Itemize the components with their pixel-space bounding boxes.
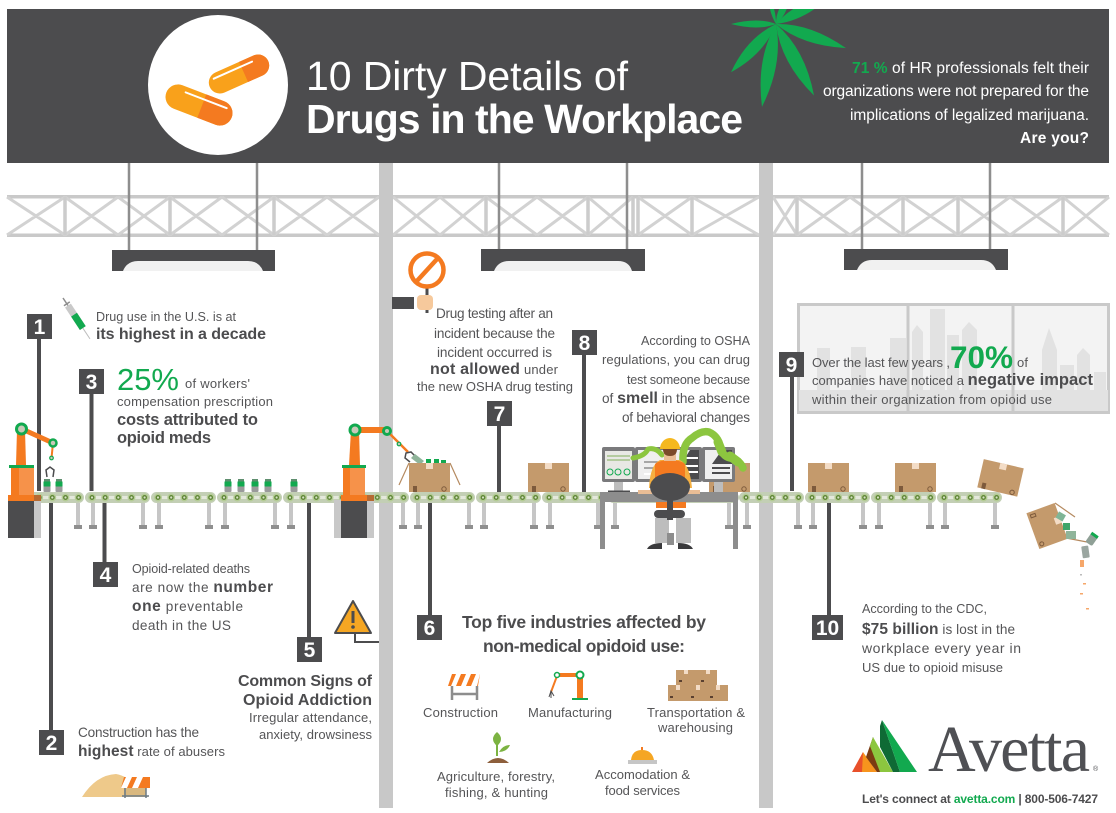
title (306, 53, 743, 142)
item 4: opioid deaths (93, 562, 273, 633)
item 3: 25 percent: opioid meds (117, 429, 211, 447)
desk with monitors and worker (600, 432, 743, 549)
item 8: OSHA smell: of behavioral changes (622, 410, 750, 425)
callout: 71 percent of HR professionals: implications of legalized marijuana. (850, 107, 1089, 124)
desk (600, 492, 738, 549)
item 8: OSHA smell (572, 330, 751, 425)
item 10: 75 billion: US due to opioid misuse (862, 660, 1003, 675)
item 2: construction: 2 (46, 732, 57, 755)
Avetta logo: Avetta (928, 713, 1090, 786)
item 7: post incident testing: Drug testing after an (436, 306, 553, 321)
support pillars (379, 163, 773, 808)
item 9: 70 percent in window panel (779, 304, 1108, 412)
item 6: top five industries: Top five industries affected by (462, 612, 706, 632)
item 8: OSHA smell: 8 (579, 332, 591, 355)
item 9: 70 percent in window panel: within their organization from opioid use (811, 392, 1052, 407)
item 8: OSHA smell: of smell in the absence (602, 390, 750, 407)
industry: manufacturing: Manufacturing (528, 705, 612, 720)
item 5: signs of addiction: Common Signs of (238, 673, 373, 690)
robot arm 2 (334, 425, 424, 538)
industry: accommodation: food services (605, 783, 680, 798)
item 8: OSHA smell: According to OSHA (641, 334, 751, 348)
callout: 71 percent of HR professionals (823, 60, 1089, 147)
callout: 71 percent of HR professionals: Are you? (1020, 130, 1089, 147)
conveyor belt (19, 492, 1002, 529)
pill bottles on belt (44, 479, 298, 492)
item 3: 25 percent (79, 362, 273, 447)
item 7: post incident testing: 7 (494, 403, 505, 426)
item 2: construction: Construction has the (78, 725, 199, 740)
industry: transportation: Transportation & (647, 705, 745, 720)
item 3: 25 percent: 3 (86, 371, 97, 394)
callout: 71 percent of HR professionals: 71 % of HR professionals felt their (852, 60, 1089, 77)
item 1: drug use: its highest in a decade (96, 326, 266, 343)
item 3: 25 percent: compensation prescription (117, 394, 273, 409)
item 7: post incident testing (392, 254, 573, 426)
industry: agriculture: fishing, & hunting (445, 785, 548, 800)
item 2: construction: highest rate of abusers (78, 743, 226, 760)
hanging lamps (112, 163, 1008, 271)
item 6: top five industries (417, 612, 745, 800)
item 5: signs of addiction (238, 601, 379, 742)
item 1: drug use: 1 (34, 316, 46, 339)
industry: agriculture: Agriculture, forestry, (437, 769, 555, 784)
window with skyline (798, 304, 1108, 412)
item 10: 75 billion (812, 602, 1021, 675)
roof truss (7, 195, 1109, 237)
callout: 71 percent of HR professionals: organizations were not prepared for the (823, 83, 1089, 100)
item 3: 25 percent: 25% (117, 362, 179, 397)
industry: construction (423, 674, 498, 720)
item 3: 25 percent: costs attributed to (117, 411, 258, 429)
item 4: opioid deaths: death in the US (132, 618, 231, 633)
icon: syringe (60, 296, 93, 341)
item 6: top five industries: non-medical opidoid use: (483, 636, 685, 656)
item 8: OSHA smell: regulations, you can drug (602, 352, 750, 367)
monitors (602, 447, 735, 492)
industry: accommodation (595, 747, 690, 798)
logo mark (852, 720, 917, 772)
industry: manufacturing (528, 672, 612, 720)
item 9: 70 percent in window panel: Over the last few years , (812, 355, 950, 370)
item 7: post incident testing: the new OSHA drug testing (417, 379, 573, 394)
item 10: 75 billion: According to the CDC, (862, 602, 987, 616)
item 3: 25 percent: of workers' (185, 376, 250, 391)
item 9: 70 percent in window panel: companies have noticed a negative impact (812, 371, 1094, 389)
icon: marijuana leaf (731, 9, 846, 107)
item 5: signs of addiction: Opioid Addiction (243, 692, 372, 709)
contact line: Let's connect at avetta.com | 800-506-7427 (862, 792, 1098, 806)
robot arm 1 (8, 424, 56, 538)
item 7: post incident testing: not allowed under (430, 361, 559, 378)
title: 10 Dirty Details of (306, 53, 629, 99)
item 9: 70 percent in window panel: 70% (950, 339, 1013, 375)
header banner (7, 0, 1109, 163)
item 2: construction (39, 725, 226, 798)
signpost lines (37, 339, 831, 731)
open box on belt (399, 459, 460, 492)
item 4: opioid deaths: one preventable (132, 598, 243, 615)
item 10: 75 billion: 10 (816, 617, 839, 640)
item 1: drug use: Drug use in the U.S. is at (96, 310, 236, 324)
item 6: top five industries: 6 (424, 617, 435, 640)
title: Drugs in the Workplace (306, 96, 743, 142)
item 10: 75 billion: $75 billion is lost in the (862, 621, 1015, 638)
item 4: opioid deaths: are now the number (132, 579, 273, 596)
item 4: opioid deaths: Opioid-related deaths (132, 562, 250, 576)
icon: pills in white circle (148, 15, 288, 155)
item 5: signs of addiction: 5 (304, 639, 316, 662)
item 5: signs of addiction: Irregular attendance, (249, 710, 372, 725)
item 9: 70 percent in window panel: of (1017, 355, 1028, 370)
icon: sand pile and barrier (82, 774, 150, 798)
Avetta logo: ® (1093, 765, 1099, 773)
industry: transportation (647, 670, 745, 735)
Avetta logo (852, 713, 1099, 806)
industry: accommodation: Accomodation & (595, 767, 690, 782)
boxes on belt (528, 459, 1024, 497)
item 4: opioid deaths: 4 (100, 564, 112, 587)
item 8: OSHA smell: test someone because (627, 373, 750, 387)
item 1: drug use (27, 296, 266, 343)
item 7: post incident testing: incident because the (434, 326, 555, 341)
industry: construction: Construction (423, 705, 498, 720)
item 10: 75 billion: workplace every year in (861, 640, 1021, 656)
industry: agriculture (437, 732, 555, 800)
item 7: post incident testing: incident occurred is (437, 345, 552, 360)
industry: transportation: warehousing (657, 720, 733, 735)
green smoke (633, 432, 743, 468)
icon: hand holding prohibition sign (392, 254, 444, 313)
falling box and bottles (1026, 503, 1099, 610)
worker (638, 438, 700, 549)
item 5: signs of addiction: anxiety, drowsiness (259, 727, 372, 742)
item 9: 70 percent in window panel: 9 (786, 354, 797, 377)
icon: warning sign (335, 601, 379, 642)
